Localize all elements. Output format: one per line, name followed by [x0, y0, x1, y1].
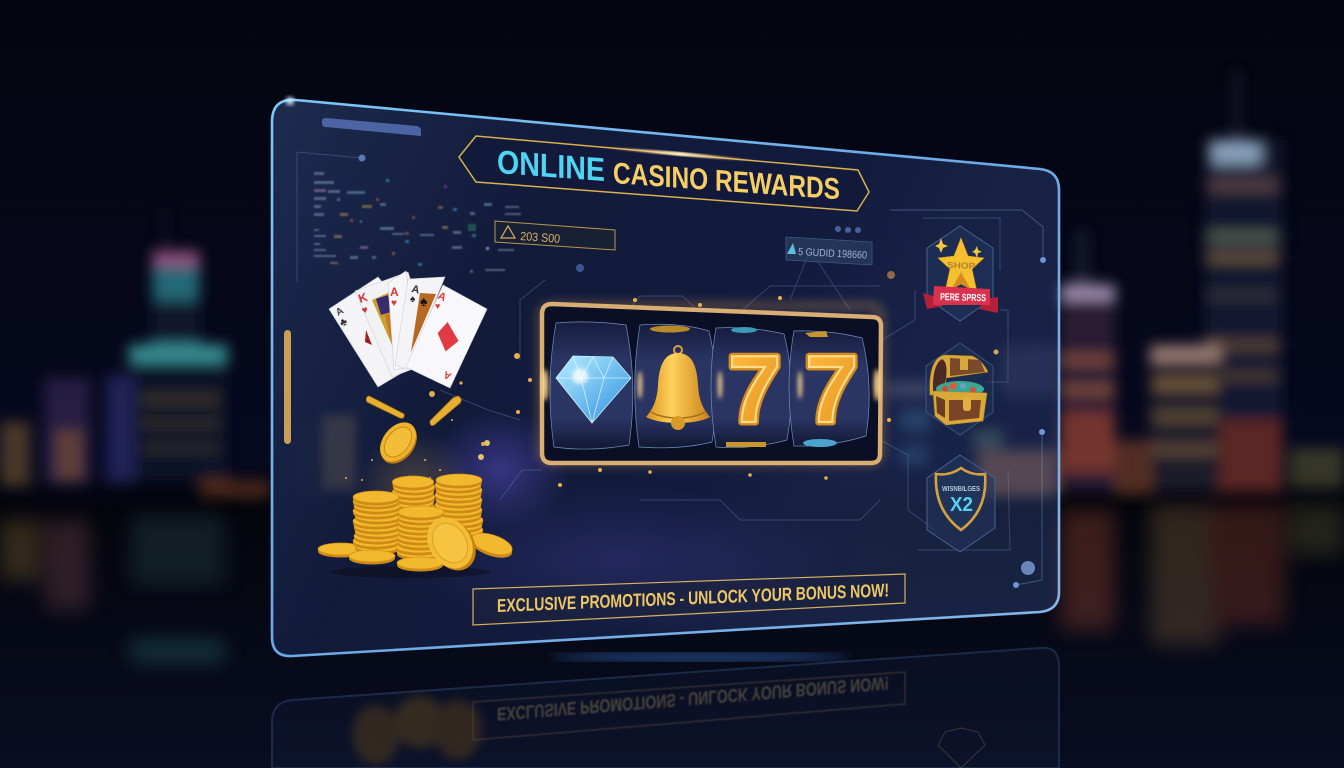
playing cards fan: [329, 271, 487, 388]
seven symbol: 7: [805, 336, 858, 443]
card: ace of spades: A: [410, 283, 421, 297]
info badge right: 5 GUDID 198660: [798, 246, 868, 262]
card: ace of diamonds: A: [442, 368, 453, 381]
right tall skyscraper: [1205, 70, 1283, 492]
stack B: [392, 476, 435, 516]
card: ace of diamonds: [406, 285, 487, 388]
warning triangle icon: [501, 226, 515, 238]
left slider handle: [284, 330, 291, 444]
stack A: [353, 491, 401, 554]
star caption: SHOP: [947, 260, 975, 271]
card: ace of spades: [395, 277, 445, 369]
reward icon: treasure chest: [926, 343, 993, 435]
info badge left: [495, 221, 615, 250]
blurred city skyline: [0, 70, 1344, 498]
slot frame: [542, 304, 881, 463]
inner glows: [320, 412, 788, 588]
reflected coins: [352, 696, 482, 765]
lens flares: [542, 369, 880, 401]
corner sparkle: [286, 97, 294, 105]
gold star: [938, 238, 984, 292]
card: ace of diamonds: A: [436, 290, 448, 304]
reel 2: [635, 324, 716, 448]
stack C: [435, 474, 483, 538]
sail icon: [787, 243, 796, 254]
title banner: [459, 136, 869, 211]
title text ONLINE: ONLINE: [497, 144, 605, 189]
flat coins left: [318, 543, 364, 558]
card: ace of hearts: A: [390, 285, 399, 299]
sparkles: [935, 238, 948, 253]
coin stacks: [318, 474, 515, 579]
reel 4: [789, 331, 869, 447]
card: ace of hearts: [388, 271, 418, 370]
stack D: [396, 506, 444, 560]
reflected promo strip: EXCLUSIVE PROMOTIONS - UNLOCK YOUR BONUS NOW!: [497, 673, 889, 725]
card: ace of diamonds: ♥: [435, 301, 440, 311]
card: king of hearts: [355, 272, 436, 377]
diamond symbol: [556, 356, 631, 423]
sparks: [345, 381, 485, 481]
seven symbol: 7: [728, 336, 781, 443]
city seen through glass: [885, 345, 1057, 496]
reward icon: star badge: PERE SPRSS: [940, 292, 986, 304]
chest lid: [930, 355, 988, 395]
card: king of hearts: K: [357, 290, 369, 306]
reflected promo strip: [473, 672, 905, 740]
card: king of hearts: ♥: [361, 305, 370, 317]
falling coins: [345, 381, 485, 481]
bell symbol: [646, 346, 710, 430]
frame glow: [541, 306, 881, 462]
reward icon: star badge: [923, 226, 998, 321]
seven symbol: 7: [728, 336, 781, 443]
promo strip: EXCLUSIVE PROMOTIONS - UNLOCK YOUR BONUS NOW!: [497, 579, 889, 616]
left low buildings: [0, 375, 356, 498]
banner highlight: [600, 145, 760, 163]
card: ace of spades: ♠: [410, 294, 416, 305]
shield label: WISNBILGES: [942, 484, 980, 493]
title text CASINO REWARDS: CASINO REWARDS: [613, 157, 840, 206]
top left status bar: [322, 118, 421, 136]
large coin: [373, 415, 424, 471]
circuit nodes: [358, 154, 1046, 588]
panel: glass display: [272, 100, 1059, 656]
large leaning coin: [418, 509, 485, 579]
tilted coin right: [469, 529, 515, 562]
flat coin front: [397, 557, 443, 572]
shield: [936, 468, 985, 530]
card: ace of spades: ♠: [420, 293, 428, 309]
gems: [936, 381, 984, 397]
flat coin middle: [349, 550, 395, 564]
slot machine: [541, 304, 881, 463]
left skyscraper: [129, 208, 228, 480]
reward icon: x2 shield: [927, 455, 995, 552]
blue glow under panel: [550, 654, 850, 660]
card: ace of clubs: A: [334, 305, 346, 319]
data readout dots: [314, 172, 521, 273]
panel rim: [272, 100, 1059, 656]
reel 3: [711, 327, 791, 448]
red ribbon: [923, 293, 998, 313]
card: ace of hearts: ♥: [391, 298, 397, 309]
reflection of panel on the floor: [272, 648, 1059, 768]
info badge right: [786, 237, 872, 265]
promo strip: [473, 574, 905, 625]
chest base: [933, 391, 987, 425]
multiplier: X2: [950, 494, 973, 516]
card: ace of clubs: [329, 277, 440, 387]
info badge left: 203 S00: [520, 229, 561, 246]
seven symbol: 7: [805, 336, 858, 443]
right mid towers: [1060, 230, 1344, 495]
floor reflections: [330, 566, 490, 578]
reflected shield: [938, 728, 985, 768]
card: ace of clubs: ♣: [338, 316, 350, 330]
city reflection on water: [0, 505, 1344, 662]
circuit traces: [297, 152, 1043, 585]
reel 1: [550, 322, 633, 449]
